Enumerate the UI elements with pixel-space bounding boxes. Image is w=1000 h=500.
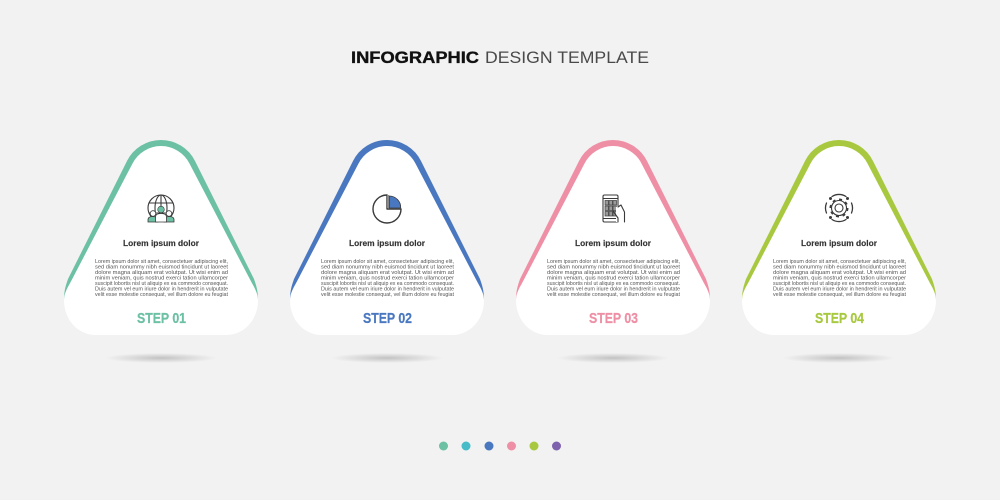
- heading: Lorem ipsum dolor: [575, 238, 652, 248]
- body text: suscipit lobortis nisl ut aliquip ex ea commodo consequat.: [547, 281, 680, 287]
- triangle outline: [742, 140, 936, 300]
- shadow: [105, 353, 217, 363]
- body text: suscipit lobortis nisl ut aliquip ex ea commodo consequat.: [321, 281, 454, 287]
- step label: STEP 02: [363, 311, 412, 327]
- body text: minim veniam, quis nostrud exerci tation ullamcorper: [773, 276, 906, 282]
- body text: Lorem ipsum dolor sit amet, consectetuer adipiscing elit,: [773, 259, 906, 265]
- body text: [547, 259, 681, 298]
- body text: [321, 259, 455, 298]
- body text: dolore magna aliquam erat volutpat. Ut wisi enim ad: [773, 270, 906, 276]
- heading: Lorem ipsum dolor: [349, 238, 426, 248]
- body text: Lorem ipsum dolor sit amet, consectetuer adipiscing elit,: [95, 259, 228, 265]
- body text: dolore magna aliquam erat volutpat. Ut wisi enim ad: [95, 270, 228, 276]
- body text: Duis autem vel eum iriure dolor in hendrerit in vulputate: [773, 286, 906, 292]
- step label: STEP 01: [137, 311, 186, 327]
- body text: velit esse molestie consequat, vel illum dolore eu feugiat: [321, 292, 455, 298]
- body text: suscipit lobortis nisl ut aliquip ex ea commodo consequat.: [95, 281, 228, 287]
- body text: Lorem ipsum dolor sit amet, consectetuer adipiscing elit,: [547, 259, 680, 265]
- body text: suscipit lobortis nisl ut aliquip ex ea commodo consequat.: [773, 281, 906, 287]
- heading: Lorem ipsum dolor: [801, 238, 878, 248]
- panel: step 03: [516, 140, 710, 363]
- body text: sed diam nonummy nibh euismod tincidunt ut laoreet: [321, 264, 455, 270]
- white card: [516, 146, 710, 335]
- triangle outline: [290, 140, 484, 300]
- shadow: [557, 353, 669, 363]
- title: [351, 48, 649, 67]
- heading: Lorem ipsum dolor: [123, 238, 200, 248]
- body text: Duis autem vel eum iriure dolor in hendrerit in vulputate: [321, 286, 454, 292]
- step label: STEP 03: [589, 311, 638, 327]
- step label: STEP 04: [815, 311, 865, 327]
- icon: globe with people: [148, 195, 174, 222]
- panel: step 02: [290, 140, 484, 363]
- white card: [290, 146, 484, 335]
- shadow: [331, 353, 443, 363]
- icon: hand holding phone: [603, 195, 624, 222]
- body text: minim veniam, quis nostrud exerci tation ullamcorper: [95, 276, 228, 282]
- triangle outline: [64, 140, 258, 300]
- shadow: [783, 353, 895, 363]
- white card: [64, 146, 258, 335]
- body text: velit esse molestie consequat, vel illum dolore eu feugiat: [95, 292, 229, 298]
- icon: pie chart: [373, 195, 401, 223]
- title: DESIGN TEMPLATE: [485, 48, 649, 67]
- body text: sed diam nonummy nibh euismod tincidunt ut laoreet: [547, 264, 681, 270]
- body text: velit esse molestie consequat, vel illum dolore eu feugiat: [547, 292, 681, 298]
- body text: dolore magna aliquam erat volutpat. Ut wisi enim ad: [321, 270, 454, 276]
- white card: [742, 146, 936, 335]
- panel: step 04: [742, 140, 936, 363]
- body text: sed diam nonummy nibh euismod tincidunt ut laoreet: [95, 264, 229, 270]
- pagination dots: [439, 442, 561, 450]
- body text: [773, 259, 907, 298]
- body text: dolore magna aliquam erat volutpat. Ut wisi enim ad: [547, 270, 680, 276]
- body text: minim veniam, quis nostrud exerci tation ullamcorper: [547, 276, 680, 282]
- title: INFOGRAPHIC: [351, 48, 479, 67]
- icon: gear with cycle arrows: [826, 194, 852, 222]
- body text: [95, 259, 229, 298]
- body text: velit esse molestie consequat, vel illum dolore eu feugiat: [773, 292, 907, 298]
- triangle outline: [516, 140, 710, 300]
- body text: sed diam nonummy nibh euismod tincidunt ut laoreet: [773, 264, 907, 270]
- body text: Duis autem vel eum iriure dolor in hendrerit in vulputate: [547, 286, 680, 292]
- body text: minim veniam, quis nostrud exerci tation ullamcorper: [321, 276, 454, 282]
- body text: Lorem ipsum dolor sit amet, consectetuer adipiscing elit,: [321, 259, 454, 265]
- body text: Duis autem vel eum iriure dolor in hendrerit in vulputate: [95, 286, 228, 292]
- panel: step 01: [64, 140, 258, 363]
